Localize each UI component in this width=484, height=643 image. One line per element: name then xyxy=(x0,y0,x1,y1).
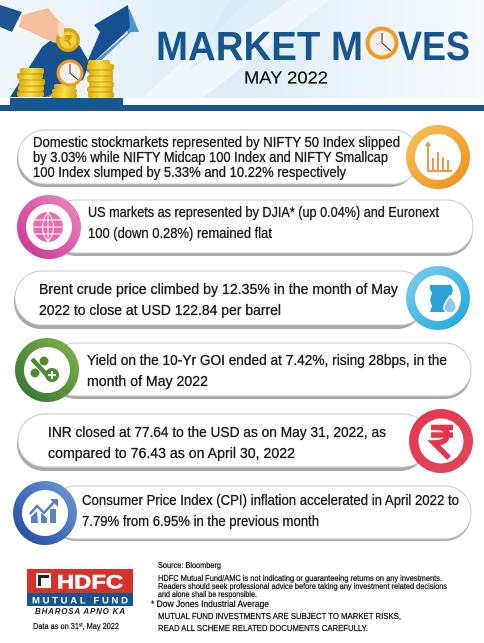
title: MARKET M xyxy=(156,23,363,69)
title: VES xyxy=(398,23,470,69)
panel: header xyxy=(0,0,484,111)
text: INR closed at 77.64 to the USD as on May 31, 2022, as xyxy=(48,425,386,441)
text: US markets as represented by DJIA* (up 0.04%) and Euronext xyxy=(88,205,439,221)
panel: US markets xyxy=(17,195,473,259)
risk statement xyxy=(158,612,401,633)
icon: rising chart xyxy=(13,481,77,545)
icon: globe xyxy=(17,195,81,259)
panel: brent crude xyxy=(14,266,470,330)
disclaimer: Readers should seek professional advice before taking any investment related decisions xyxy=(158,582,447,591)
illustration: hand, coins, rising arrow and clock: ₹ xyxy=(64,33,73,48)
text xyxy=(87,353,447,390)
text: Brent crude price climbed by 12.35% in the month of May xyxy=(39,282,399,298)
logo: HDFC Mutual Fund: MUTUAL FUND xyxy=(32,596,128,606)
illustration: hand, coins, rising arrow and clock xyxy=(0,5,139,106)
panel: footer xyxy=(27,561,447,633)
pill xyxy=(50,343,471,399)
pill xyxy=(50,486,471,541)
text: 100 Index slumped by 5.33% and 10.22% respectively xyxy=(33,165,347,181)
text xyxy=(88,205,439,242)
panel: domestic stockmarkets xyxy=(17,125,470,189)
risk statement: READ ALL SCHEME RELATED DOCUMENTS CAREFULLY. xyxy=(158,624,368,633)
panel: INR xyxy=(17,409,473,473)
text: Consumer Price Index (CPI) inflation accelerated in April 2022 to xyxy=(82,493,459,509)
data date: st xyxy=(79,622,83,628)
icon: yield symbol xyxy=(15,338,79,402)
footnote: * Dow Jones Industrial Average xyxy=(151,599,269,609)
text xyxy=(33,135,400,181)
text: Yield on the 10-Yr GOI ended at 7.42%, rising 28bps, in the xyxy=(87,353,447,369)
text: 7.79% from 6.95% in the previous month xyxy=(82,514,319,530)
logo: HDFC Mutual Fund xyxy=(27,569,133,616)
subtitle: MAY 2022 xyxy=(244,68,328,88)
text xyxy=(39,282,399,319)
disclaimer: and alone shall be responsible. xyxy=(158,590,257,599)
disclaimer: HDFC Mutual Fund/AMC is not indicating or guaranteeing returns on any investments. xyxy=(158,574,442,583)
icon: oil barrel and drop xyxy=(406,266,470,330)
icon: rupee xyxy=(409,409,473,473)
text: month of May 2022 xyxy=(87,374,208,390)
icon: bar chart xyxy=(406,125,470,189)
logo: HDFC Mutual Fund: HDFC xyxy=(57,572,123,594)
disclaimer xyxy=(158,574,447,599)
pill xyxy=(17,130,420,187)
header baseline bar xyxy=(0,105,484,111)
text xyxy=(82,493,459,530)
icon: clock in title xyxy=(366,26,398,60)
text: compared to 76.43 as on April 30, 2022 xyxy=(48,446,295,462)
data date: Data as on 31 xyxy=(33,622,83,631)
text: by 3.03% while NIFTY Midcap 100 Index and NIFTY Smallcap xyxy=(33,150,388,166)
header background xyxy=(0,0,484,100)
panel: yield xyxy=(15,338,471,402)
text: 2022 to close at USD 122.84 per barrel xyxy=(39,303,281,319)
text: Domestic stockmarkets represented by NIFTY 50 Index slipped xyxy=(33,135,400,151)
source: Source: Bloomberg xyxy=(158,561,221,570)
text xyxy=(48,425,386,462)
pill xyxy=(50,200,473,256)
risk statement: MUTUAL FUND INVESTMENTS ARE SUBJECT TO MARKET RISKS, xyxy=(158,612,401,621)
pill xyxy=(17,414,430,471)
panel: CPI xyxy=(13,481,471,545)
data date: , May 2022 xyxy=(83,622,120,631)
pill xyxy=(14,271,427,329)
text: 100 (down 0.28%) remained flat xyxy=(88,226,272,242)
logo: HDFC Mutual Fund: BHAROSA APNO KA xyxy=(35,607,125,616)
